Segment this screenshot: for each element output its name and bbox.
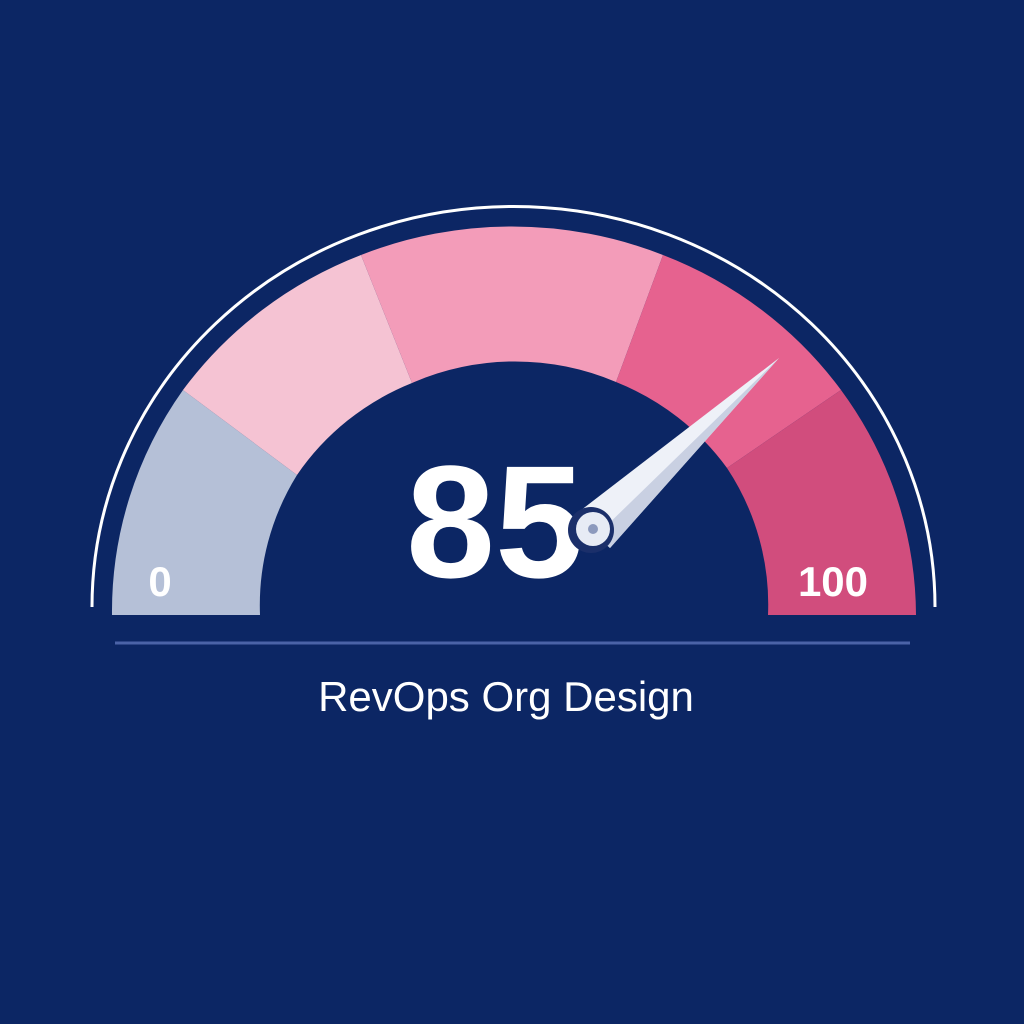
value 85: 85 bbox=[406, 432, 584, 611]
gauge band bbox=[112, 226, 916, 615]
segment: darker pink bbox=[727, 390, 916, 615]
segment: dark pink bbox=[616, 255, 841, 468]
needle bbox=[568, 358, 779, 553]
label 0: 0 bbox=[148, 558, 172, 605]
label 100: 100 bbox=[798, 558, 868, 605]
segment: light pink bbox=[183, 255, 412, 475]
outer arc line bbox=[92, 207, 935, 607]
baseline divider bbox=[115, 642, 910, 644]
segment: grey bbox=[112, 390, 297, 615]
title: RevOps Org Design bbox=[318, 673, 694, 720]
segment: medium pink bbox=[361, 226, 663, 383]
